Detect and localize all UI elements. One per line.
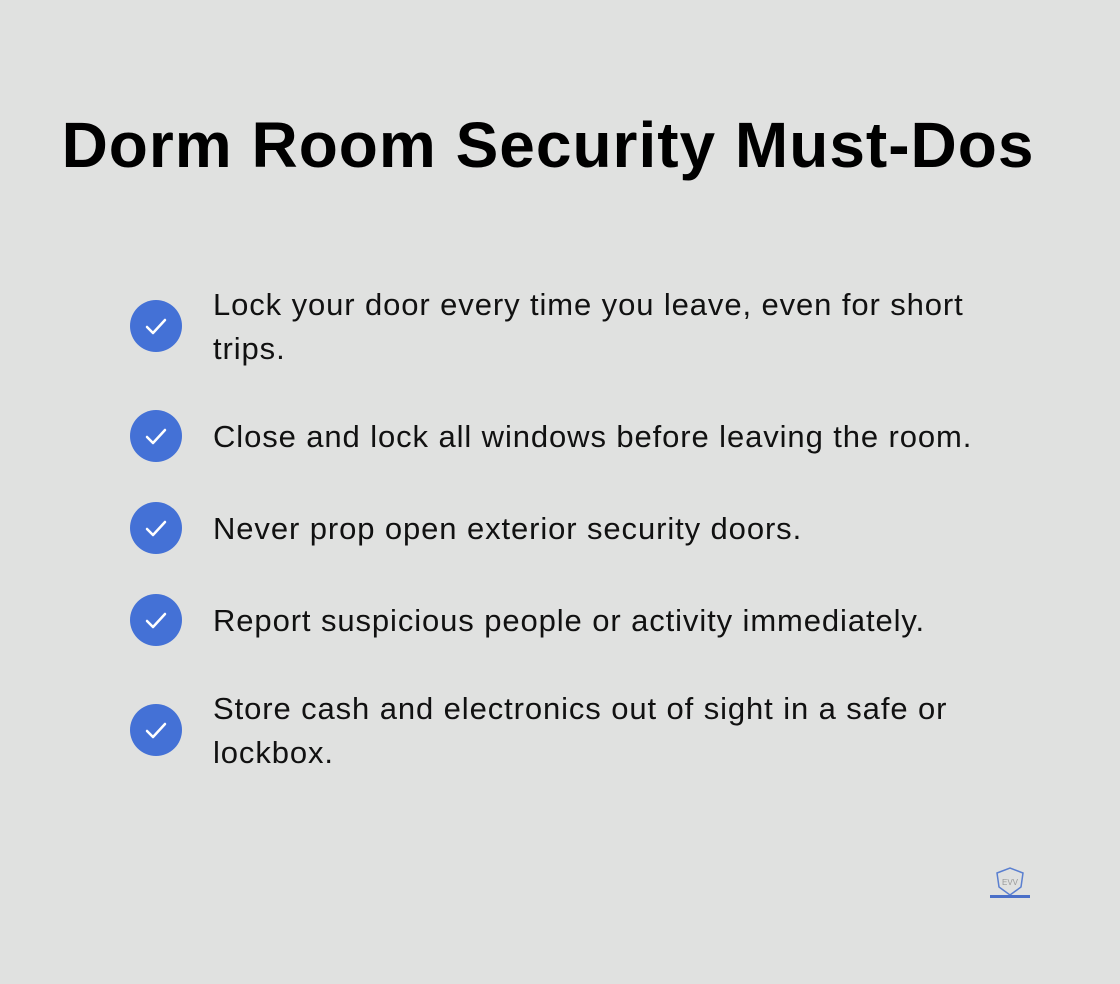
- icon: check 2: [130, 410, 182, 462]
- icon: check 1: [130, 300, 182, 352]
- text 5: lockbox.: [213, 735, 334, 770]
- text 5: Store cash and electronics out of sight in a safe or: [213, 691, 947, 726]
- icon: check 5: [130, 704, 182, 756]
- text 1: trips.: [213, 331, 286, 366]
- icon: check 3: [130, 502, 182, 554]
- logo: EVV: [1002, 878, 1019, 887]
- icon: check 4: [130, 594, 182, 646]
- text 4: Report suspicious people or activity immediately.: [213, 603, 925, 638]
- logo: [990, 867, 1030, 898]
- text 1: [213, 287, 964, 366]
- text 5: [213, 691, 947, 770]
- title: Dorm Room Security Must-Dos: [62, 109, 1034, 181]
- text 2: Close and lock all windows before leaving the room.: [213, 419, 972, 454]
- text 3: Never prop open exterior security doors.: [213, 511, 802, 546]
- text 1: Lock your door every time you leave, even for short: [213, 287, 964, 322]
